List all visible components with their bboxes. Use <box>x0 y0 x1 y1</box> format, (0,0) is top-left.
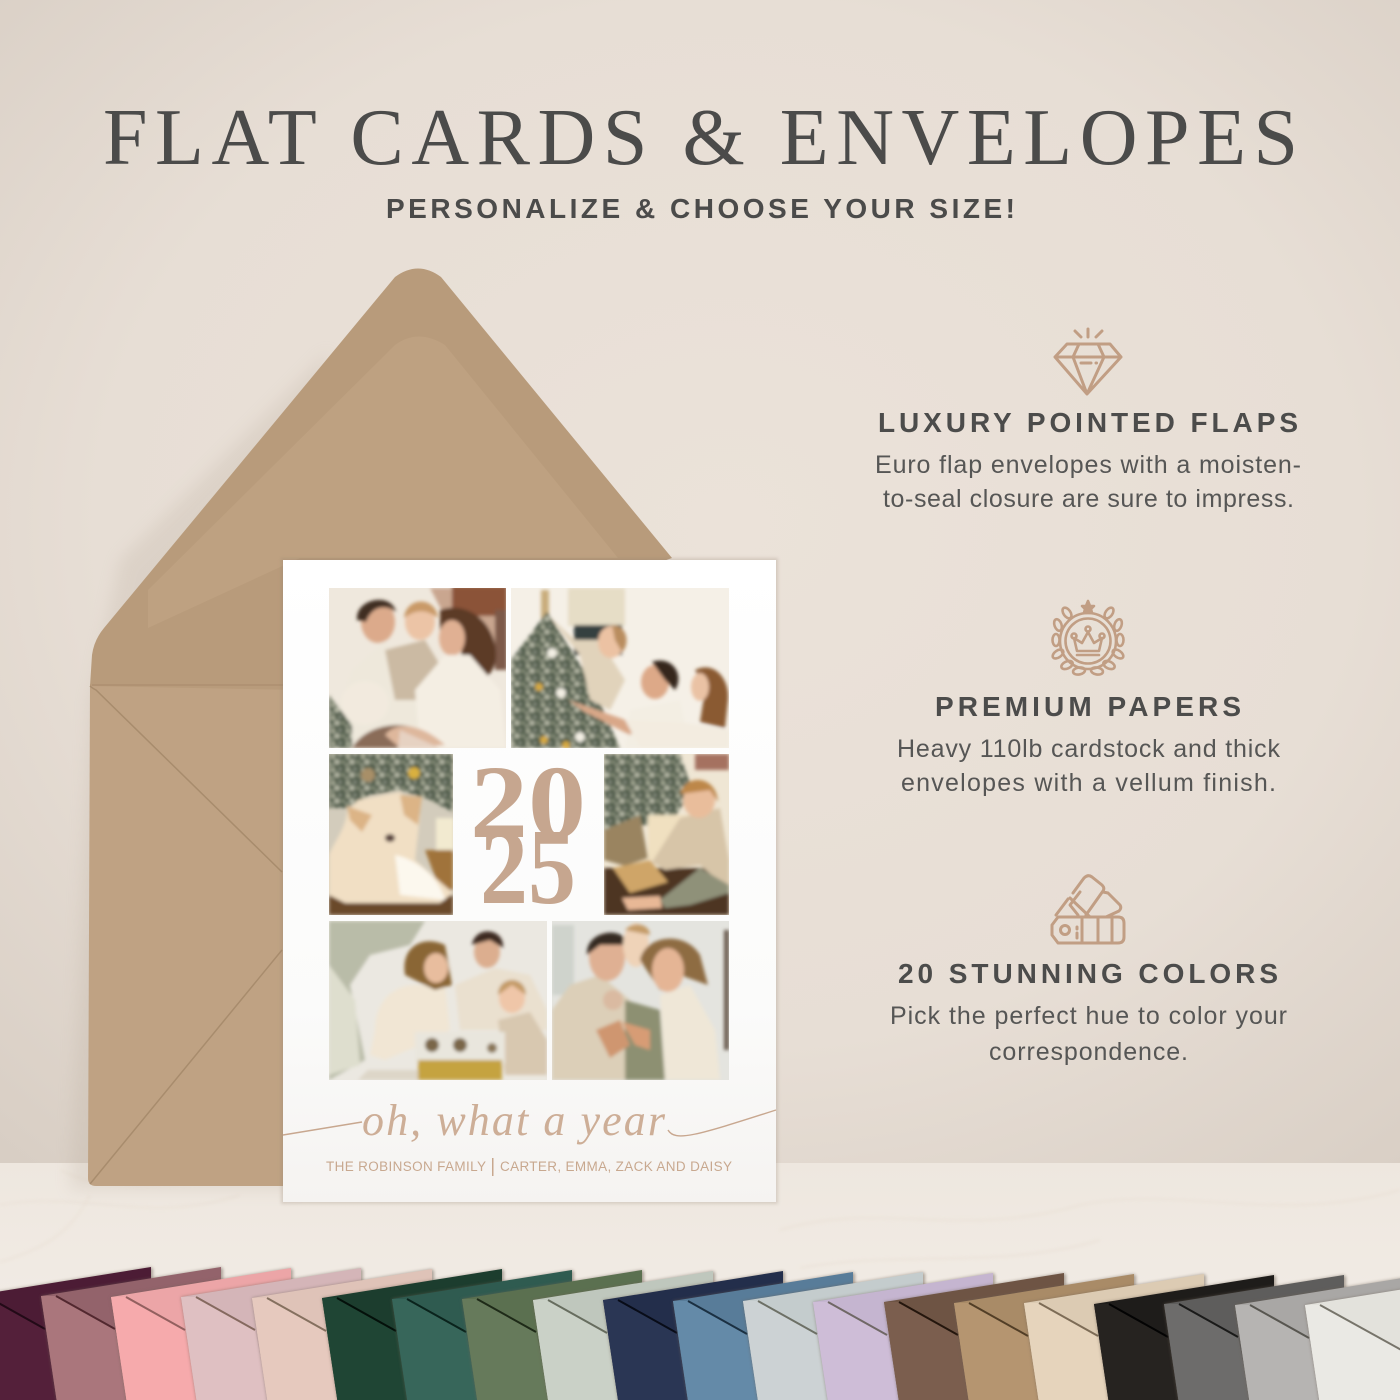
icon: diamond <box>1055 329 1121 394</box>
description <box>897 735 1280 797</box>
photo: decorating the tree <box>511 588 729 749</box>
description <box>890 1002 1287 1066</box>
envelope body <box>88 684 300 1186</box>
heading: 20 STUNNING COLORS <box>898 958 1278 989</box>
photo: sparkler <box>552 921 729 1080</box>
script greeting <box>283 1096 776 1145</box>
description: envelopes with a vellum finish. <box>901 769 1276 797</box>
swatch 1 burgundy <box>0 1267 153 1400</box>
envelope seams <box>90 686 282 1184</box>
photo: boy with presents <box>604 754 729 915</box>
heading: LUXURY POINTED FLAPS <box>878 407 1298 438</box>
swatch 13 lilac <box>813 1273 995 1400</box>
family names <box>326 1158 732 1176</box>
year number 2025: 25 <box>480 808 576 927</box>
subtitle: PERSONALIZE & CHOOSE YOUR SIZE! <box>386 193 1015 224</box>
description: Pick the perfect hue to color your <box>890 1002 1287 1030</box>
photo: opening a gift <box>329 921 547 1080</box>
description: correspondence. <box>989 1038 1188 1066</box>
icon: crown seal <box>1051 601 1125 675</box>
description: to-seal closure are sure to impress. <box>883 485 1294 513</box>
swatch 8 olive <box>462 1270 644 1400</box>
swatch 9 sage <box>533 1271 715 1400</box>
photo: family on sofa <box>329 586 507 748</box>
swatch 5 peach <box>252 1269 434 1400</box>
envelope shadow <box>70 350 330 1190</box>
year number 2025 <box>470 745 586 927</box>
description: Heavy 110lb cardstock and thick <box>897 735 1280 763</box>
feature: luxury pointed flaps <box>875 329 1301 513</box>
swatch 18 charcoal <box>1164 1275 1346 1400</box>
card <box>281 558 778 1204</box>
swatch 11 blue <box>673 1272 855 1400</box>
feature: twenty colors <box>890 876 1287 1066</box>
envelope colour swatches <box>0 1267 1400 1400</box>
swatch 17 black <box>1094 1275 1276 1400</box>
heading: PREMIUM PAPERS <box>935 691 1241 722</box>
swatch 14 brown <box>884 1273 1066 1400</box>
family names: CARTER, EMMA, ZACK AND DAISY <box>500 1159 732 1174</box>
script greeting: oh, what a year <box>362 1096 666 1145</box>
swatch 2 mauve <box>41 1267 223 1400</box>
swatch 12 pale blue grey <box>743 1272 925 1400</box>
icon: colour swatch fan <box>1052 876 1124 943</box>
envelope pointed flap <box>90 268 672 690</box>
title: FLAT CARDS & ENVELOPES <box>103 94 1298 182</box>
swatch 3 pink <box>111 1268 293 1400</box>
envelope <box>70 268 672 1190</box>
swatch 16 cream <box>1024 1274 1206 1400</box>
swatch 19 grey <box>1235 1276 1400 1400</box>
family names: THE ROBINSON FAMILY <box>326 1159 486 1174</box>
feature: premium papers <box>897 601 1280 797</box>
swatch 6 forest <box>322 1269 504 1400</box>
swatch 20 off white <box>1305 1276 1400 1400</box>
year number 2025: 20 <box>470 745 586 860</box>
marble floor <box>0 1163 1400 1400</box>
description: Euro flap envelopes with a moisten- <box>875 451 1301 479</box>
swatch 7 teal green <box>392 1270 574 1400</box>
swatch 4 blush <box>181 1268 363 1400</box>
swatch 15 tan <box>954 1274 1136 1400</box>
photo: white dog <box>329 754 454 915</box>
envelope liner <box>148 336 618 628</box>
swatch 10 navy <box>603 1271 785 1400</box>
description <box>875 451 1301 513</box>
